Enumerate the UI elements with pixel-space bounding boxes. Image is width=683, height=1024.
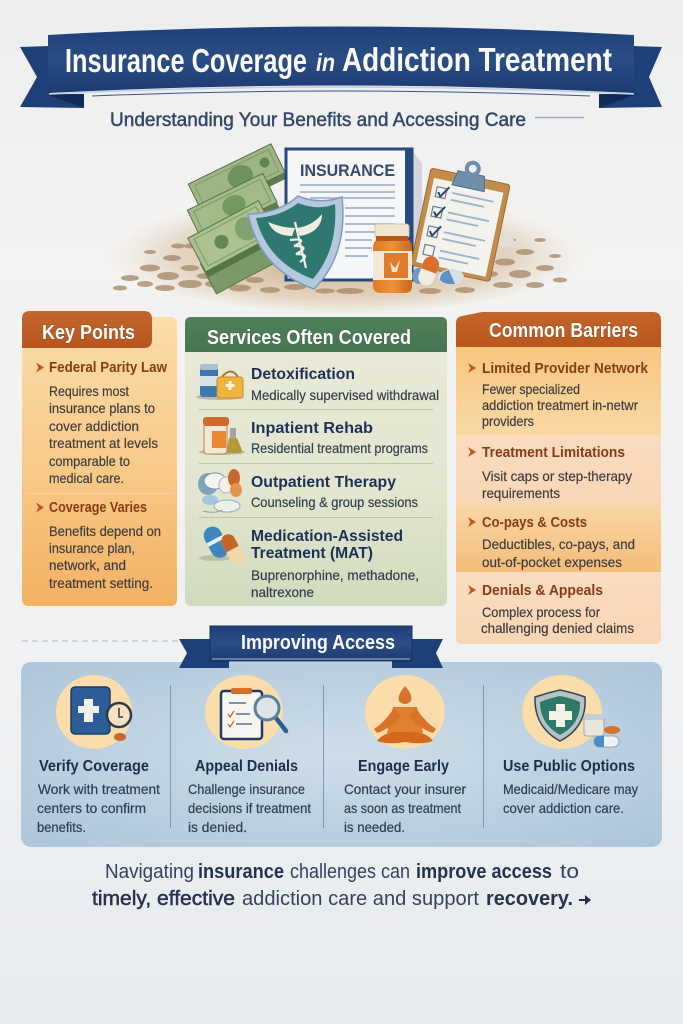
service: medication-assisted treatment xyxy=(199,523,419,600)
barrier: denials and appeals: challenging denied claims xyxy=(481,620,634,636)
service: detoxification xyxy=(196,364,439,403)
services header xyxy=(185,317,447,352)
barrier: limited provider network: Limited Provider Network xyxy=(482,361,649,377)
point: coverage varies: Coverage Varies xyxy=(49,500,147,516)
barrier: limited provider network: addiction treatmert in-netwr xyxy=(482,397,638,413)
service: outpatient therapy: Counseling & group sessions xyxy=(251,494,418,510)
barrier: treatment limitations: Visit caps or step-therapy xyxy=(482,468,632,484)
barrier: denials and appeals: Denials & Appeals xyxy=(482,583,603,599)
closing statement: insurance xyxy=(198,861,284,883)
action: use public options xyxy=(503,675,638,816)
barrier: treatment limitations xyxy=(468,445,632,501)
barrier: denials and appeals: Complex process for xyxy=(482,604,600,620)
service: detoxification: Medically supervised withdrawal xyxy=(251,387,439,403)
action: verify coverage: centers to confirm xyxy=(37,800,146,816)
capsules xyxy=(412,254,464,288)
action: verify coverage: benefits. xyxy=(37,819,86,835)
closing statement: Navigating xyxy=(105,861,194,883)
services header: Services Often Covered xyxy=(207,327,411,349)
improving access banner: Improving Access xyxy=(241,632,395,654)
action: engage early xyxy=(344,675,466,835)
action: appeal denials: decisions if treatment xyxy=(188,800,311,816)
service: outpatient therapy xyxy=(198,469,418,512)
panel: services often covered xyxy=(185,317,447,606)
panel: key points xyxy=(22,311,177,606)
service: medication-assisted treatment: Treatment (MAT) xyxy=(251,545,373,562)
barriers header: Common Barriers xyxy=(489,320,638,342)
point: federal parity law: insurance plans to xyxy=(49,400,155,416)
icon: capsules xyxy=(199,523,246,567)
action: engage early: Engage Early xyxy=(358,758,449,775)
service: medication-assisted treatment: Buprenorphine, methadone, xyxy=(251,567,419,583)
barriers header xyxy=(456,312,661,347)
improving access banner xyxy=(179,626,443,668)
closing statement: timely, effective xyxy=(92,888,235,910)
icon: bottle and first-aid bag xyxy=(196,364,244,400)
title text: Insurance Coverage xyxy=(65,42,307,79)
barrier: co-pays and costs xyxy=(468,515,635,570)
barrier: co-pays and costs: Co-pays & Costs xyxy=(482,515,587,531)
barrier: limited provider network: providers xyxy=(482,413,534,429)
panel: common barriers xyxy=(456,312,661,644)
service: inpatient rehab: Residential treatment programs xyxy=(251,440,428,456)
ribbon body xyxy=(48,26,634,93)
action: verify coverage: Work with treatment xyxy=(38,781,160,797)
icon: shield and medicine xyxy=(522,675,620,749)
barrier: limited provider network xyxy=(468,361,649,429)
action: use public options: cover addiction care. xyxy=(503,800,624,816)
closing statement xyxy=(92,861,591,910)
service: medication-assisted treatment: naltrexone xyxy=(251,584,314,600)
closing statement: improve access xyxy=(416,861,552,883)
action: verify coverage xyxy=(37,675,160,835)
arrow xyxy=(579,895,591,905)
point: coverage varies xyxy=(36,500,161,591)
shield with caduceus xyxy=(248,196,343,289)
icon: tablet and clock xyxy=(56,675,132,749)
action: engage early: as soon as treatment xyxy=(344,800,461,816)
point: federal parity law: Requires most xyxy=(49,383,129,399)
action: engage early: Contact your insurer xyxy=(344,781,466,797)
action: appeal denials xyxy=(188,675,311,835)
point: coverage varies: treatment setting. xyxy=(49,575,153,591)
action: use public options: Medicaid/Medicare may xyxy=(503,781,638,797)
title text: in xyxy=(316,49,335,77)
key points header tab xyxy=(22,311,152,348)
barrier: limited provider network: Fewer specialized xyxy=(482,381,580,397)
point: federal parity law: Federal Parity Law xyxy=(49,360,168,376)
insurance document: INSURANCE xyxy=(300,161,395,180)
left ribbon tail xyxy=(20,46,84,108)
barrier: denials and appeals xyxy=(468,583,634,636)
point: coverage varies: network, and xyxy=(49,557,126,573)
closing statement: challenges can xyxy=(290,861,410,883)
icon: pill bottle and vial xyxy=(199,417,245,455)
subtitle: Understanding Your Benefits and Accessing Care xyxy=(110,110,526,131)
action: appeal denials: Challenge insurance xyxy=(188,781,305,797)
service: inpatient rehab: Inpatient Rehab xyxy=(251,420,373,437)
title text xyxy=(65,41,612,79)
point: federal parity law: medical care. xyxy=(49,470,124,486)
closing statement: to xyxy=(560,861,579,883)
service: detoxification: Detoxification xyxy=(251,366,355,383)
service: outpatient therapy: Outpatient Therapy xyxy=(251,474,396,491)
action: use public options: Use Public Options xyxy=(503,758,635,775)
closing statement: recovery. xyxy=(486,888,573,910)
point: federal parity law xyxy=(36,360,168,486)
point: coverage varies: Benefits depend on xyxy=(49,523,161,539)
icon: meditating figure xyxy=(365,675,445,749)
action: verify coverage: Verify Coverage xyxy=(39,758,149,775)
icon: clipboard and magnifier xyxy=(205,675,286,749)
key points header tab: Key Points xyxy=(42,322,135,344)
barrier: treatment limitations: requirements xyxy=(482,485,560,501)
barrier: co-pays and costs: Deductibles, co-pays, and xyxy=(482,536,635,552)
service: inpatient rehab xyxy=(199,417,428,456)
insurance document xyxy=(286,149,422,280)
panel: improving access xyxy=(21,662,662,847)
closing statement: addiction care and support xyxy=(242,888,479,910)
action: engage early: is needed. xyxy=(344,819,405,835)
ground rubble xyxy=(105,188,585,312)
clipboard with checklist xyxy=(410,154,513,282)
service: medication-assisted treatment: Medication-Assisted xyxy=(251,528,403,545)
right ribbon tail xyxy=(599,46,662,108)
point: coverage varies: insurance plan, xyxy=(49,540,135,556)
point: federal parity law: treatment at levels xyxy=(49,435,158,451)
action: appeal denials: is denied. xyxy=(188,819,247,835)
money stack xyxy=(187,144,288,294)
medicine bottle xyxy=(373,224,412,293)
barrier: treatment limitations: Treatment Limitations xyxy=(482,445,625,461)
hero illustration: insurance, money, shield, clipboard, medicine xyxy=(105,144,585,312)
title text: Addiction Treatment xyxy=(342,41,612,78)
title banner xyxy=(20,26,662,108)
point: federal parity law: comparable to xyxy=(49,453,130,469)
barrier: co-pays and costs: out-of-pocket expenses xyxy=(482,554,622,570)
icon: pills xyxy=(198,469,242,512)
action: appeal denials: Appeal Denials xyxy=(195,758,298,775)
point: federal parity law: cover addiction xyxy=(49,418,139,434)
